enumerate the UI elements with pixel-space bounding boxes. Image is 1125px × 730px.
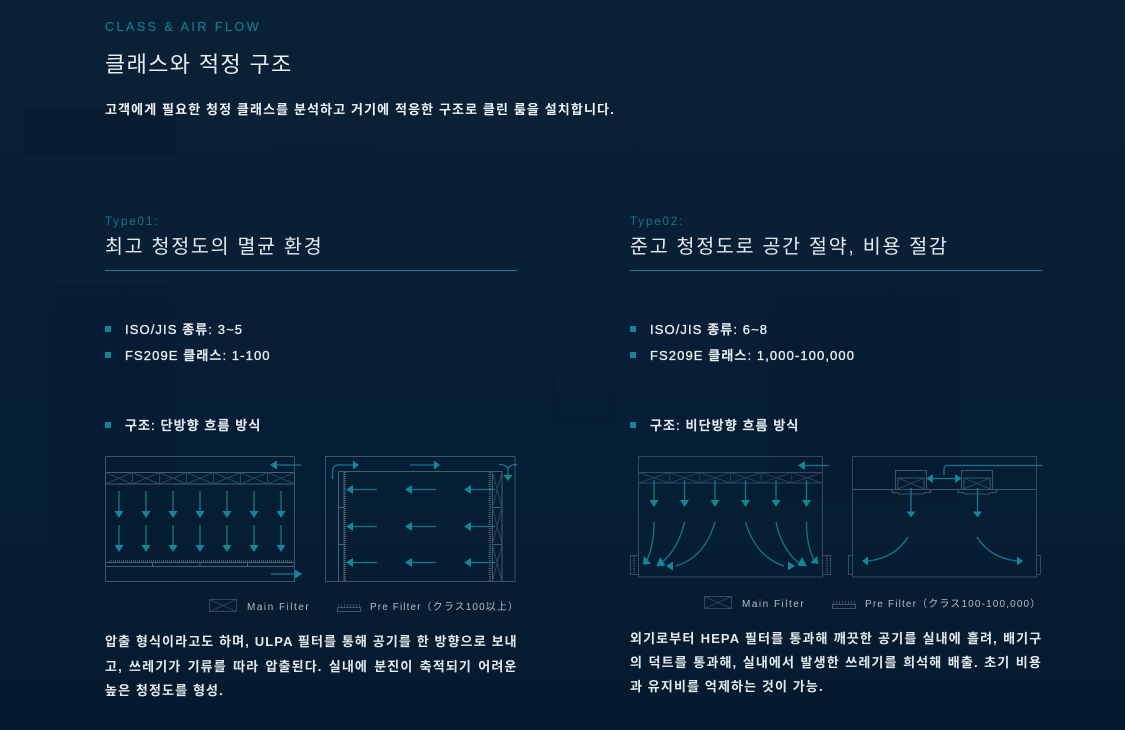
type 01 description: 고, 쓰레기가 기류를 따라 압출된다. 실내에 분진이 축적되기 어려운 xyxy=(105,658,517,674)
flow arrows xyxy=(862,466,1042,566)
type 01 description xyxy=(105,634,518,698)
type 02 ISO spec: ISO/JIS 종류: 6~8 xyxy=(650,322,768,337)
type 02 description: 과 유지비를 억제하는 것이 가능. xyxy=(630,679,824,694)
type 02 description: 의 덕트를 통과해, 실내에서 발생한 쓰레기를 희석해 배출. 초기 비용 xyxy=(630,655,1042,670)
lead text: 고객에게 필요한 청정 클래스를 분석하고 거기에 적응한 구조로 클린 룸을 설치합니다. xyxy=(105,102,615,117)
type 02 description: 외기로부터 HEPA 필터를 통과해 깨끗한 공기를 실내에 흘려, 배기구 xyxy=(630,631,1042,646)
type 01 divider xyxy=(105,270,517,271)
type 02 label: Type02: xyxy=(630,216,684,228)
panel: type 02 xyxy=(630,216,1042,694)
legend icon: pre filter type 02 xyxy=(832,601,856,608)
type 01 description: 압출 형식이라고도 하며, ULPA 필터를 통해 공기를 한 방향으로 보내 xyxy=(105,634,518,649)
diagram: non-unidirectional fan filter units xyxy=(848,456,1042,577)
title: 클래스와 적정 구조 xyxy=(105,52,293,77)
legend icon: main filter type 01 xyxy=(210,600,236,612)
type 02 description xyxy=(630,631,1042,694)
diagram: unidirectional horizontal flow xyxy=(326,456,517,582)
type 01 FS209E spec: FS209E 클래스: 1-100 xyxy=(125,348,271,363)
flow arrows xyxy=(114,460,302,578)
legend icon: pre filter type 01 xyxy=(338,604,360,612)
type 02 heading: 준고 청정도로 공간 절약, 비용 절감 xyxy=(630,236,949,258)
legend text: pre filter type 02: Pre Filter（クラス100-100,000） xyxy=(865,598,1041,610)
type 01 ISO spec: ISO/JIS 종류: 3~5 xyxy=(125,322,243,337)
type 02 FS209E spec: FS209E 클래스: 1,000-100,000 xyxy=(650,348,855,363)
type 01 heading: 최고 청정도의 멸균 환경 xyxy=(105,236,323,258)
flow arrows xyxy=(332,460,517,567)
type 01 description: 높은 청정도를 형성. xyxy=(105,683,224,698)
panel: type 01 xyxy=(105,216,518,698)
type 01 label: Type01: xyxy=(105,216,159,228)
legend text: main filter type 02: Main Filter xyxy=(742,598,805,610)
diagram: unidirectional downward flow xyxy=(106,456,302,582)
flow arrows xyxy=(643,461,829,570)
diagram: non-unidirectional ceiling filters xyxy=(630,456,830,577)
legend icon: main filter type 02 xyxy=(704,596,732,608)
legend text: pre filter type 01: Pre Filter（クラス100以上） xyxy=(370,602,519,612)
eyebrow: class and air flow: CLASS & AIR FLOW xyxy=(105,20,261,34)
type 02 divider xyxy=(630,270,1042,271)
type 02 structure: 구조: 비단방향 흐름 방식 xyxy=(650,418,799,433)
legend text: main filter type 01: Main Filter xyxy=(247,602,310,612)
type 01 structure: 구조: 단방향 흐름 방식 xyxy=(125,418,261,433)
